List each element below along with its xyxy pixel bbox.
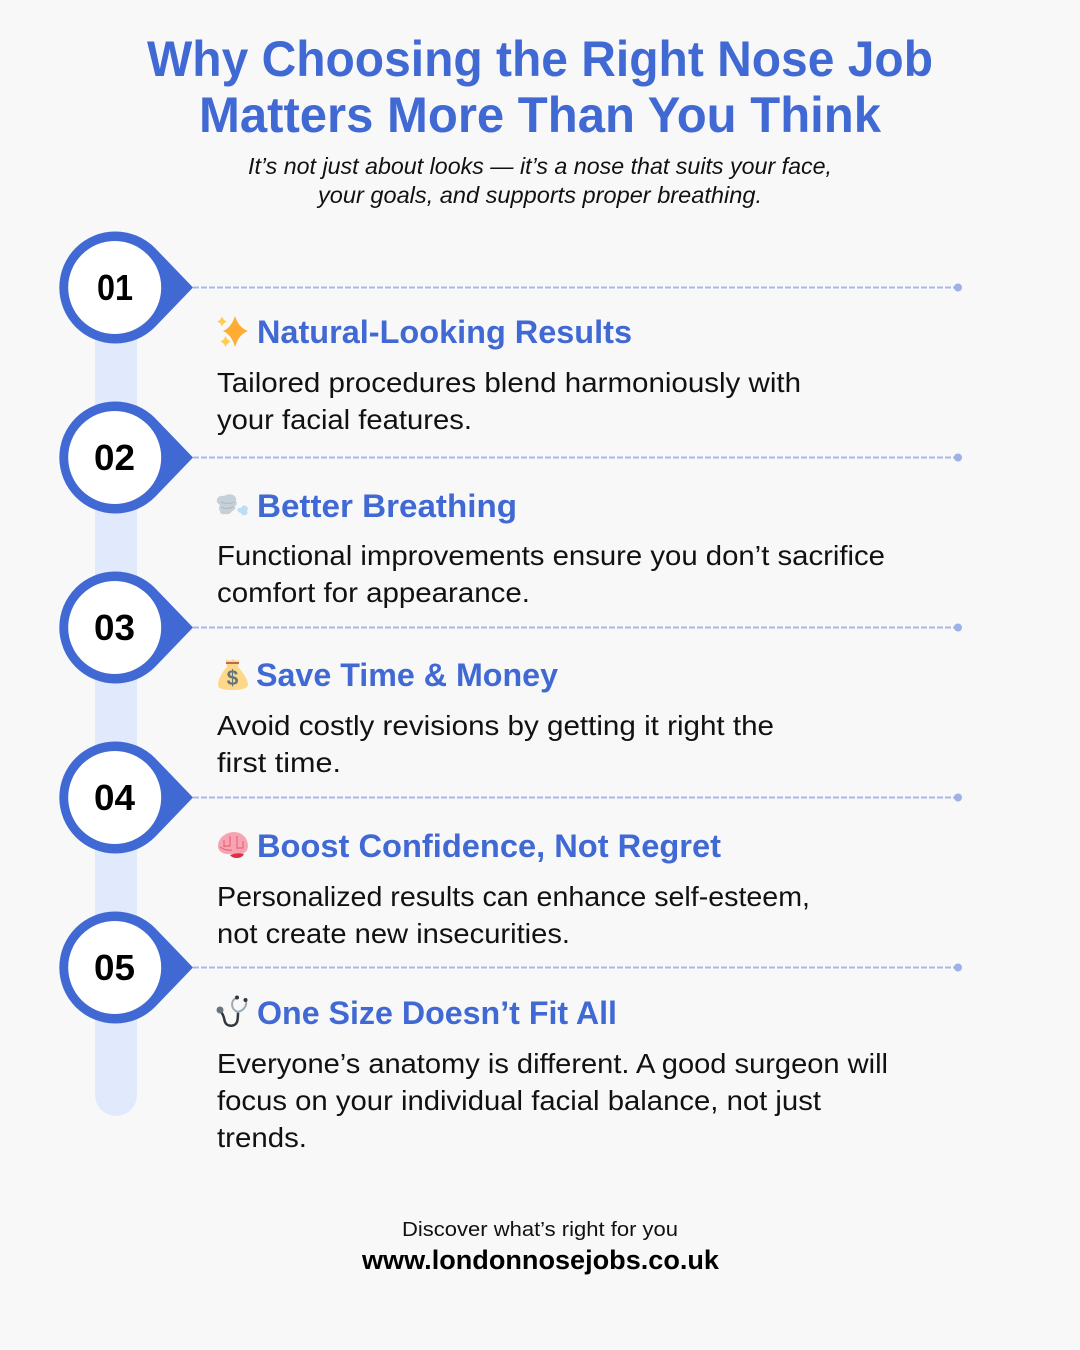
timeline track xyxy=(95,330,137,1116)
text: one size description xyxy=(217,1048,888,1153)
text: save time and money description xyxy=(217,710,774,778)
heading: boost confidence: Boost Confidence, Not Regret xyxy=(257,828,721,864)
step 02 marker and connector xyxy=(59,402,962,514)
text: better breathing description xyxy=(217,540,885,608)
step 03 marker and connector xyxy=(59,572,962,684)
step 01 marker and connector xyxy=(59,232,962,344)
heading: one size doesn't fit all: One Size Doesn’t Fit All xyxy=(257,995,617,1031)
text: natural-looking results description xyxy=(217,367,801,435)
text: natural-looking results description: your facial features. xyxy=(217,404,472,435)
icon: breath cloud xyxy=(217,494,248,515)
step 05 marker and connector xyxy=(59,912,962,1024)
icon: brain xyxy=(218,832,248,858)
subtitle: It’s not just about looks — it’s a nose that suits your face, xyxy=(248,153,832,179)
text: better breathing description: Functional improvements ensure you don’t sacrifice xyxy=(217,540,885,571)
footer call to action: www.londonnosejobs.co.uk xyxy=(361,1245,720,1275)
subtitle: your goals, and supports proper breathing. xyxy=(316,182,762,208)
text: boost confidence description xyxy=(217,881,810,949)
heading: better breathing: Better Breathing xyxy=(257,488,517,524)
footer call to action xyxy=(361,1218,720,1275)
text: boost confidence description: not create new insecurities. xyxy=(217,918,570,949)
icon: stethoscope xyxy=(216,996,248,1026)
icon: money bag xyxy=(218,659,248,690)
icon: sparkles xyxy=(217,316,248,347)
heading: natural-looking results: Natural-Looking Results xyxy=(257,314,632,350)
text: better breathing description: comfort for appearance. xyxy=(217,577,530,608)
step 05 marker and connector: 05 xyxy=(94,947,135,988)
title: Matters More Than You Think xyxy=(199,86,882,143)
footer call to action: Discover what’s right for you xyxy=(402,1218,678,1241)
text: natural-looking results description: Tailored procedures blend harmoniously with xyxy=(217,367,801,398)
text: save time and money description: first time. xyxy=(217,747,341,778)
step 01 marker and connector: 01 xyxy=(97,267,133,308)
text: one size description: Everyone’s anatomy is different. A good surgeon will xyxy=(217,1048,888,1079)
step 04 marker and connector xyxy=(59,742,962,853)
icon: money bag: $ xyxy=(227,667,239,690)
title xyxy=(147,30,933,143)
text: save time and money description: Avoid costly revisions by getting it right the xyxy=(217,710,774,741)
subtitle xyxy=(248,153,832,208)
text: one size description: trends. xyxy=(217,1122,307,1153)
heading: save time and money: Save Time & Money xyxy=(256,657,558,693)
text: one size description: focus on your individual facial balance, not just xyxy=(217,1085,821,1116)
step 04 marker and connector: 04 xyxy=(94,777,135,818)
title: Why Choosing the Right Nose Job xyxy=(147,30,933,87)
step 02 marker and connector: 02 xyxy=(94,437,135,478)
step 03 marker and connector: 03 xyxy=(94,607,135,648)
text: boost confidence description: Personalized results can enhance self-esteem, xyxy=(217,881,810,912)
